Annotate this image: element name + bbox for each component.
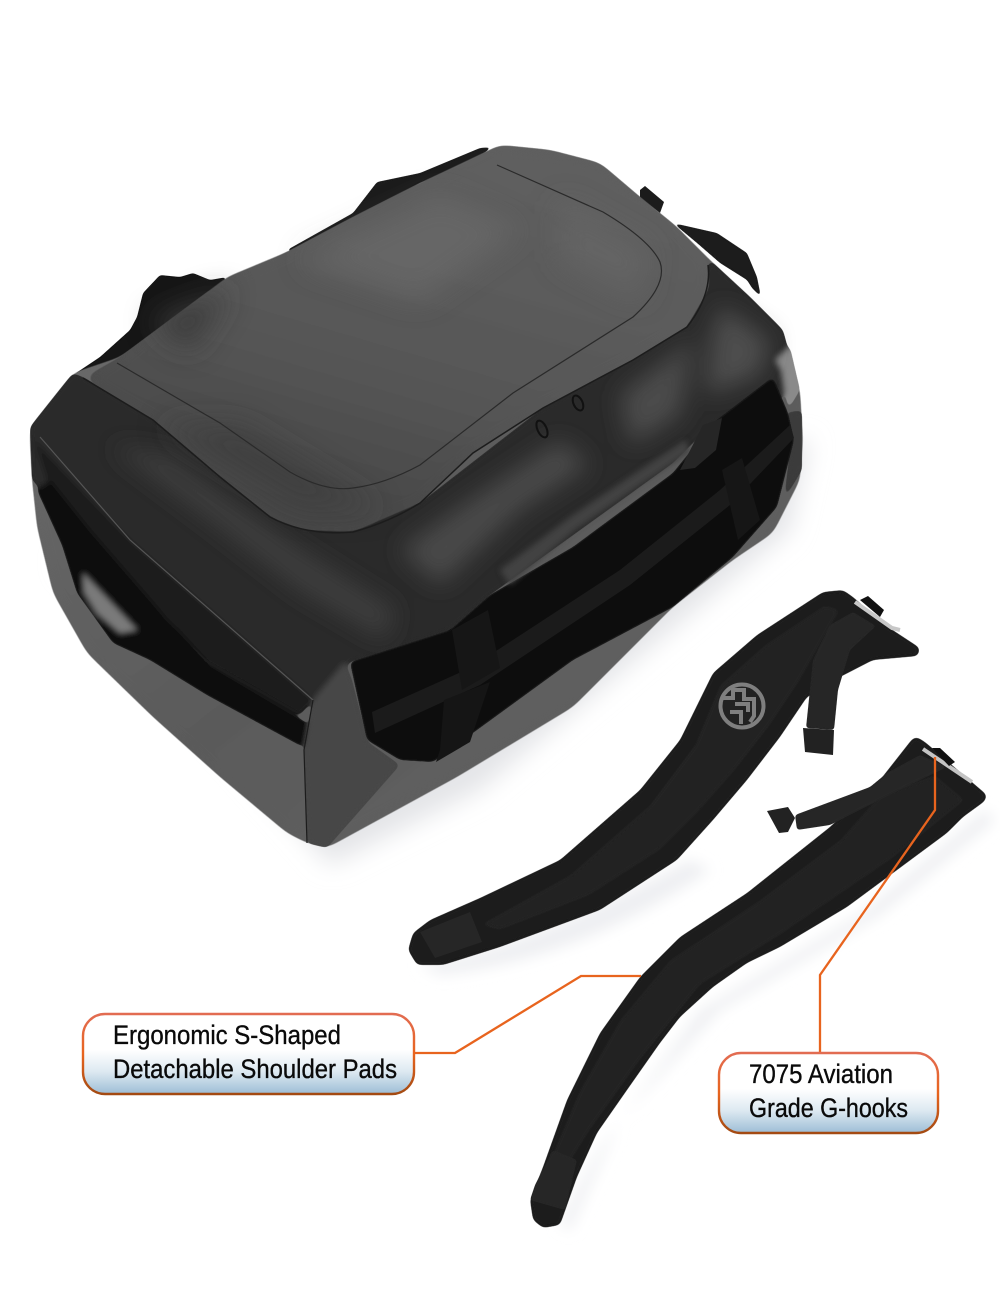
top flap [83,145,710,532]
flap outer edge [83,265,709,533]
buckle [923,749,972,782]
duffel bag [30,145,803,848]
rear corner shine [776,347,800,410]
leader line: G-hooks [820,757,935,1053]
highlights on front fabric [110,305,770,640]
flap sheen [150,195,650,510]
callout: shoulder pads [83,1014,414,1094]
pad body [408,590,920,965]
below seam darker band [34,440,313,715]
side panel upper binding [500,440,690,585]
top left carry handle [73,273,227,376]
pad inner mesh [548,775,965,1170]
right side strap [673,223,761,297]
corner seam [304,700,313,843]
zipper pulls [534,394,585,439]
callout text line two: Detachable Shoulder Pads [113,1054,397,1084]
strap tab [767,807,795,833]
bag body [30,145,803,848]
black side panel [350,377,794,762]
adjustment strap [795,755,947,830]
pad adjustment strap [806,612,876,730]
callout: G-hooks [719,1053,938,1133]
pad end tab [420,912,482,958]
bag corner panel [304,662,400,848]
bag surface shading [30,260,802,848]
flap stitching [117,165,661,489]
pad end loop [530,1150,577,1210]
ground shadow [60,440,995,1230]
callout text line one: Ergonomic S-Shaped [113,1020,341,1050]
top straps [287,147,492,254]
lower left handle webbing [37,480,307,747]
lower front seam [40,437,313,700]
side panel webbing handle [372,425,794,733]
upper dark band [30,260,795,700]
strap tab [803,728,834,755]
shoulder pad two [530,737,987,1228]
pad body [530,737,987,1228]
pad buckle [855,602,900,630]
pad inner mesh [480,605,840,930]
rear tab [640,186,664,213]
callout text line one: 7075 Aviation [749,1059,893,1089]
side panel strap loops [680,418,722,470]
shoulder pad one [408,590,920,965]
brand logo [720,684,764,728]
leader line: shoulder pads [414,976,641,1053]
callout text line two: Grade G-hooks [749,1093,908,1123]
